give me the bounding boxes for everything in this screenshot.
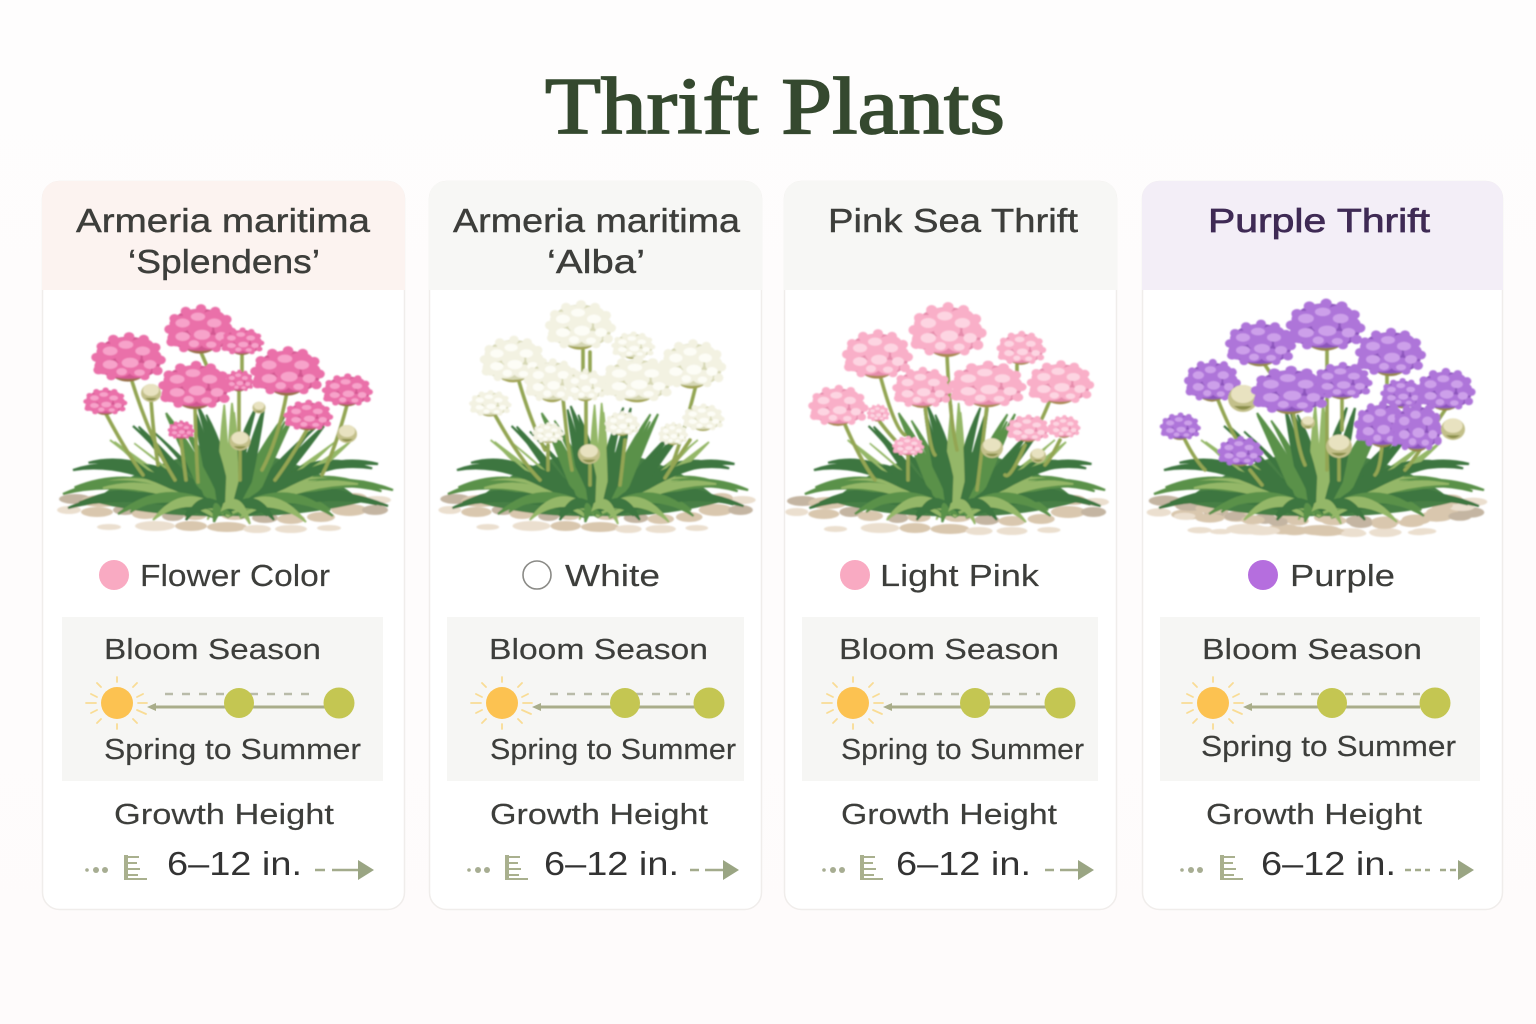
bloom season panel: Spring to Summer bbox=[490, 734, 736, 766]
growth height: Growth Height bbox=[490, 799, 708, 831]
flower colour swatch and label bbox=[1248, 558, 1395, 593]
bloom season panel: Bloom Season bbox=[1202, 634, 1422, 666]
bloom season panel: Spring to Summer bbox=[841, 734, 1084, 766]
flower colour swatch and label bbox=[840, 558, 1040, 593]
bloom season panel: Bloom Season bbox=[104, 634, 321, 666]
panel: Armeria maritima Alba bbox=[429, 181, 762, 910]
bloom season panel bbox=[1160, 617, 1480, 781]
card header bbox=[42, 181, 405, 290]
bloom season panel bbox=[62, 617, 383, 781]
heading: ‘Alba’ bbox=[547, 243, 645, 280]
growth height: Growth Height bbox=[114, 799, 334, 831]
growth height: 6–12 in. bbox=[544, 845, 679, 882]
plant illustration: light pink thrift bbox=[785, 302, 1109, 535]
flower colour swatch and label: Purple bbox=[1290, 558, 1395, 593]
bloom season panel: Bloom Season bbox=[489, 634, 708, 666]
heading: ‘Splendens’ bbox=[128, 243, 320, 280]
growth height: 6–12 in. bbox=[1261, 845, 1396, 882]
panel: Armeria maritima Splendens bbox=[42, 181, 405, 910]
growth height: 6–12 in. bbox=[896, 845, 1031, 882]
card header bbox=[784, 181, 1117, 290]
plant illustration: deep pink thrift bbox=[57, 304, 393, 533]
heading: Purple Thrift bbox=[1208, 202, 1430, 239]
bloom season panel bbox=[802, 617, 1098, 781]
heading: Pink Sea Thrift bbox=[828, 202, 1078, 239]
growth height bbox=[1180, 799, 1474, 882]
flower colour swatch and label: Flower Color bbox=[140, 558, 330, 593]
growth height bbox=[85, 799, 374, 882]
title: Thrift Plants bbox=[545, 63, 1005, 151]
heading: Armeria maritima bbox=[76, 202, 371, 239]
growth height: Growth Height bbox=[1206, 799, 1422, 831]
plant illustration: purple thrift bbox=[1147, 299, 1487, 537]
heading: Armeria maritima bbox=[453, 202, 741, 239]
panel: Pink Sea Thrift bbox=[784, 181, 1117, 910]
growth height bbox=[822, 799, 1094, 882]
flower colour swatch and label bbox=[523, 558, 660, 593]
bloom season panel: Bloom Season bbox=[839, 634, 1059, 666]
flower colour swatch and label: Light Pink bbox=[880, 558, 1040, 593]
panel: Purple Thrift bbox=[1142, 181, 1503, 910]
card header bbox=[429, 181, 762, 290]
plant illustration: white thrift bbox=[438, 300, 756, 533]
bloom season panel bbox=[447, 617, 744, 781]
growth height: Growth Height bbox=[841, 799, 1057, 831]
card header bbox=[1142, 181, 1503, 290]
growth height: 6–12 in. bbox=[167, 845, 302, 882]
growth height bbox=[467, 799, 739, 882]
bloom season panel: Spring to Summer bbox=[104, 734, 361, 766]
heading bbox=[453, 202, 741, 280]
heading bbox=[76, 202, 371, 280]
flower colour swatch and label: White bbox=[565, 558, 660, 593]
bloom season panel: Spring to Summer bbox=[1201, 731, 1456, 763]
